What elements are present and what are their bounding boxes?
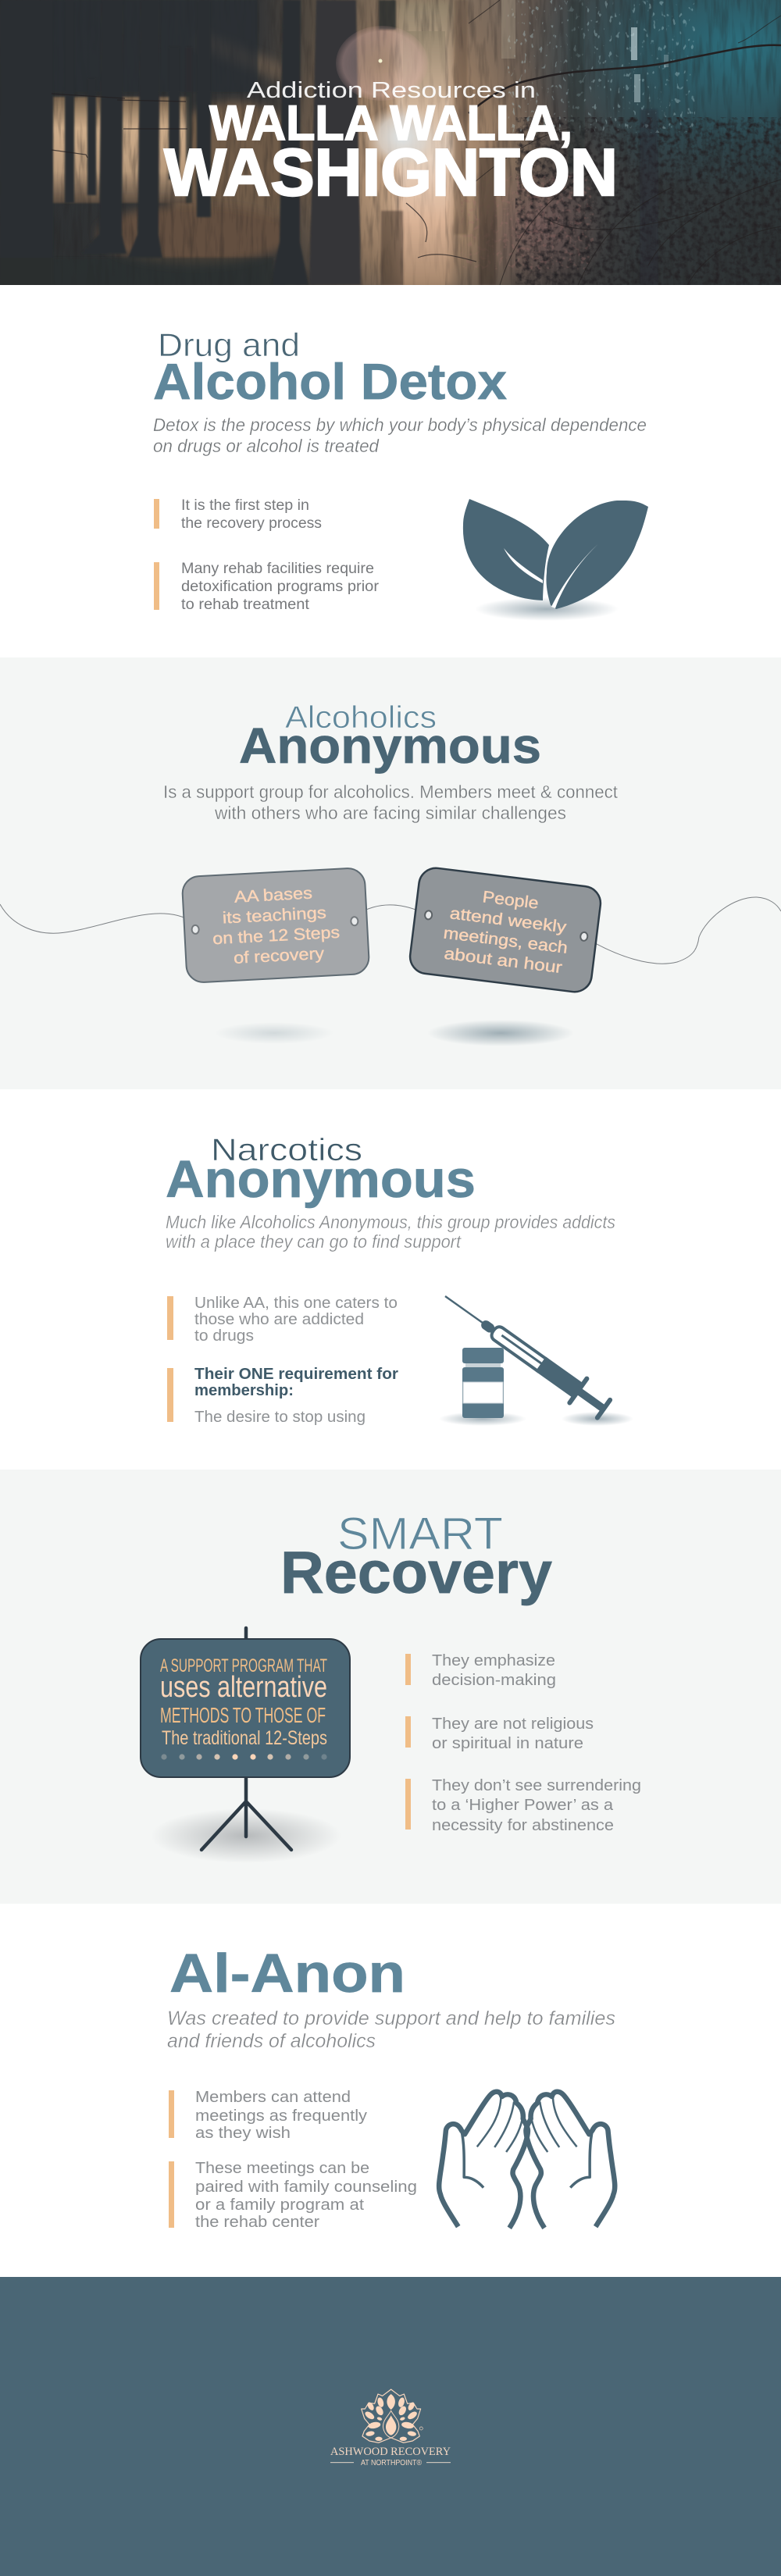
soft warm light areas [98,0,452,285]
sign: weekly meetings: meetings, each [443,924,569,957]
bullet: higher power: to a ‘Higher Power’ as a [432,1797,614,1814]
forest background image [0,0,781,355]
board text: uses alternative [160,1671,327,1704]
sign: 12 steps: AA bases [234,885,313,907]
sign: 12 steps [182,868,369,983]
board text: The traditional 12-Steps [162,1727,327,1749]
panel: smart recovery [0,1470,781,1904]
bullet: caters to drug addiction [167,1295,398,1345]
panel: alcoholics anonymous [0,657,781,1089]
hero city name: WALLA WALLA, [209,96,572,151]
bullet: higher power: They don’t see surrendering [432,1777,641,1794]
bullet: meeting frequency: as they wish [195,2125,291,2142]
bullet: not religious: or spiritual in nature [432,1735,583,1752]
hero kicker: Addiction Resources in [247,78,536,103]
sign: 12 steps: of recovery [234,945,325,967]
bullet: first step: It is the first step in [181,497,309,514]
bullet: detoxification prior to rehab [154,561,380,613]
bullet: decision-making: decision-making [432,1672,556,1689]
bullet: family counseling [169,2160,417,2231]
sign: weekly meetings: about an hour [443,945,563,977]
icon: presentation board on stand [141,1628,350,1863]
bullet: first step [154,497,322,532]
heading: alcoholics anonymous: Alcoholics [285,700,437,735]
logo tagline: AT NORTHPOINT® [361,2459,423,2467]
heading: smart recovery: SMART [337,1509,503,1559]
bullet: one requirement: The desire to stop using [194,1409,366,1426]
panel: al-anon [0,1904,781,2277]
description: with a place they can go to find support [166,1231,462,1252]
heading: smart recovery [280,1509,552,1606]
description: Was created to provide support and help to families [167,2008,615,2029]
icon: two leaves [463,499,648,621]
bullet: caters to drug addiction: Unlike AA, this one caters to [194,1295,398,1312]
description: and friends of alcoholics [167,2030,376,2052]
hero state name: WASHIGNTON [164,136,618,210]
bullet: family counseling: the rehab center [195,2214,319,2231]
icon: lotus [362,2389,423,2442]
description [153,415,647,456]
bullet: detoxification prior to rehab: Many rehab facilities require [181,561,374,577]
bullet: caters to drug addiction: to drugs [194,1327,254,1345]
pale trunks and sky specks [631,27,669,102]
bullet: meeting frequency: Members can attend [195,2089,351,2106]
heading: smart recovery: Recovery [280,1540,552,1606]
board text [160,1655,327,1749]
heading: narcotics anonymous: Narcotics [211,1133,362,1167]
bullet: higher power [405,1777,641,1834]
board dots [161,1754,327,1760]
sign shadows [215,1020,574,1046]
sign: 12 steps: its teachings [222,904,326,928]
heading: drug and alcohol detox: Drug and [158,326,300,363]
logo: ashwood recovery [330,2389,451,2467]
panel: drug and alcohol detox [0,285,781,657]
bullet: caters to drug addiction: those who are addicted [194,1311,364,1328]
description: Much like Alcoholics Anonymous, this group provides addicts [166,1212,615,1232]
icon: syringe and vial [435,1282,633,1426]
description: with others who are facing similar challenges [214,803,566,823]
bullet: not religious: They are not religious [432,1716,594,1733]
board text: METHODS TO THOSE OF [160,1703,326,1727]
bullet: meeting frequency [169,2089,367,2142]
description [163,782,619,823]
heading: narcotics anonymous: Anonymous [166,1150,476,1209]
bullet: detoxification prior to rehab: detoxification programs prior [181,579,380,595]
heading: al-anon: Al-Anon [169,1943,405,2004]
hero title [164,78,618,210]
panel: footer [0,2277,781,2576]
bullet: family counseling: or a family program at [195,2197,364,2214]
hanging string [0,897,781,964]
bullet: family counseling: These meetings can be [195,2160,369,2177]
icon: open praying hands [439,2092,615,2228]
board text: A SUPPORT PROGRAM THAT [160,1655,327,1676]
description: Is a support group for alcoholics. Members meet & connect [163,782,619,802]
description [167,2008,615,2052]
description: Detox is the process by which your body’s physical dependence [153,415,647,435]
bullet: first step: the recovery process [181,515,322,532]
sign: 12 steps: on the 12 Steps [212,924,341,948]
lens flare [336,26,428,101]
bullet: decision-making: They emphasize [432,1652,555,1669]
bullet: one requirement: membership: [194,1382,294,1399]
sign: weekly meetings: People [482,888,540,913]
tree trunks [0,0,658,285]
description: on drugs or alcohol is treated [153,436,380,456]
sign: weekly meetings [408,866,602,994]
logo wordmark: ASHWOOD RECOVERY [330,2446,451,2458]
branches [52,0,781,285]
bullet: higher power: necessity for abstinence [432,1817,614,1834]
bullet: one requirement [167,1366,398,1426]
bullet: one requirement: Their ONE requirement for [194,1366,398,1383]
bullet: family counseling: paired with family counseling [195,2179,417,2196]
heading: drug and alcohol detox: Alcohol Detox [153,353,507,410]
sign: weekly meetings: attend weekly [449,904,568,936]
heading: drug and alcohol detox [153,326,507,410]
bullet: not religious [405,1716,594,1752]
bullet: decision-making [405,1652,556,1689]
description [166,1212,615,1252]
bullet: detoxification prior to rehab: to rehab treatment [181,597,310,613]
panel: narcotics anonymous [0,1089,781,1470]
panel: hero forest header [0,0,781,355]
bullet: meeting frequency: meetings as frequently [195,2107,367,2125]
heading: alcoholics anonymous: Anonymous [239,718,541,774]
